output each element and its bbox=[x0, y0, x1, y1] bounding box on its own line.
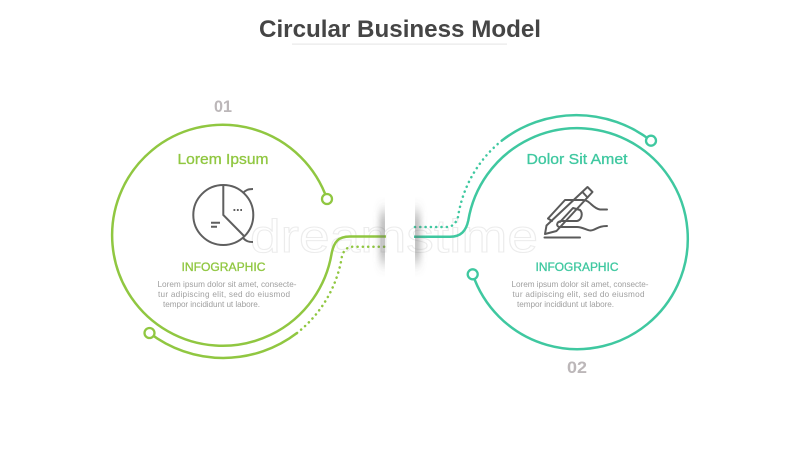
step 1 body text: tur adipiscing elit, sed do eiusmod bbox=[158, 290, 290, 299]
step 2 heading: Dolor Sit Amet bbox=[526, 152, 628, 168]
step 1 outer arc bbox=[150, 333, 297, 358]
step 1 dotted connector bbox=[297, 247, 386, 333]
panel: step 2 bbox=[414, 115, 688, 377]
step 1 end dot bbox=[322, 194, 332, 204]
fold: left shadow bbox=[382, 212, 386, 262]
step 2 body text: tempor incididunt ut labore. bbox=[517, 300, 614, 309]
step 2 inner end dot bbox=[468, 269, 478, 279]
watermark: dreamstime bbox=[250, 210, 538, 262]
step 2 body text bbox=[512, 280, 649, 309]
step 2 outer arc bbox=[502, 115, 651, 141]
step 1 body text: Lorem ipsum dolor sit amet, consecte- bbox=[158, 280, 297, 289]
title: Circular Business Model bbox=[259, 16, 541, 43]
step 2 body text: Lorem ipsum dolor sit amet, consecte- bbox=[512, 280, 649, 289]
step 1 body text bbox=[158, 280, 297, 309]
step 2 body text: tur adipiscing elit, sed do eiusmod bbox=[512, 290, 645, 299]
step 2 dotted connector bbox=[414, 141, 502, 227]
step 1 circular line with connector bbox=[112, 125, 386, 346]
number 01: 01 bbox=[214, 98, 232, 116]
fold: right shadow bbox=[414, 212, 418, 262]
step 1 subheading: INFOGRAPHIC bbox=[182, 262, 266, 274]
icon: hand writing with pen bbox=[544, 187, 607, 238]
title underline bbox=[292, 44, 507, 45]
step 1 body text: tempor incididunt ut labore. bbox=[163, 300, 260, 309]
icon: pie chart bbox=[193, 185, 253, 245]
panel: step 1 bbox=[112, 98, 386, 358]
step 2 subheading: INFOGRAPHIC bbox=[536, 262, 618, 274]
step 1 outer end dot bbox=[144, 328, 154, 338]
step 1 heading: Lorem Ipsum bbox=[178, 152, 268, 168]
step 2 circular line with connector bbox=[414, 128, 688, 349]
step 2 end dot bbox=[646, 136, 656, 146]
number 02: 02 bbox=[567, 359, 587, 377]
